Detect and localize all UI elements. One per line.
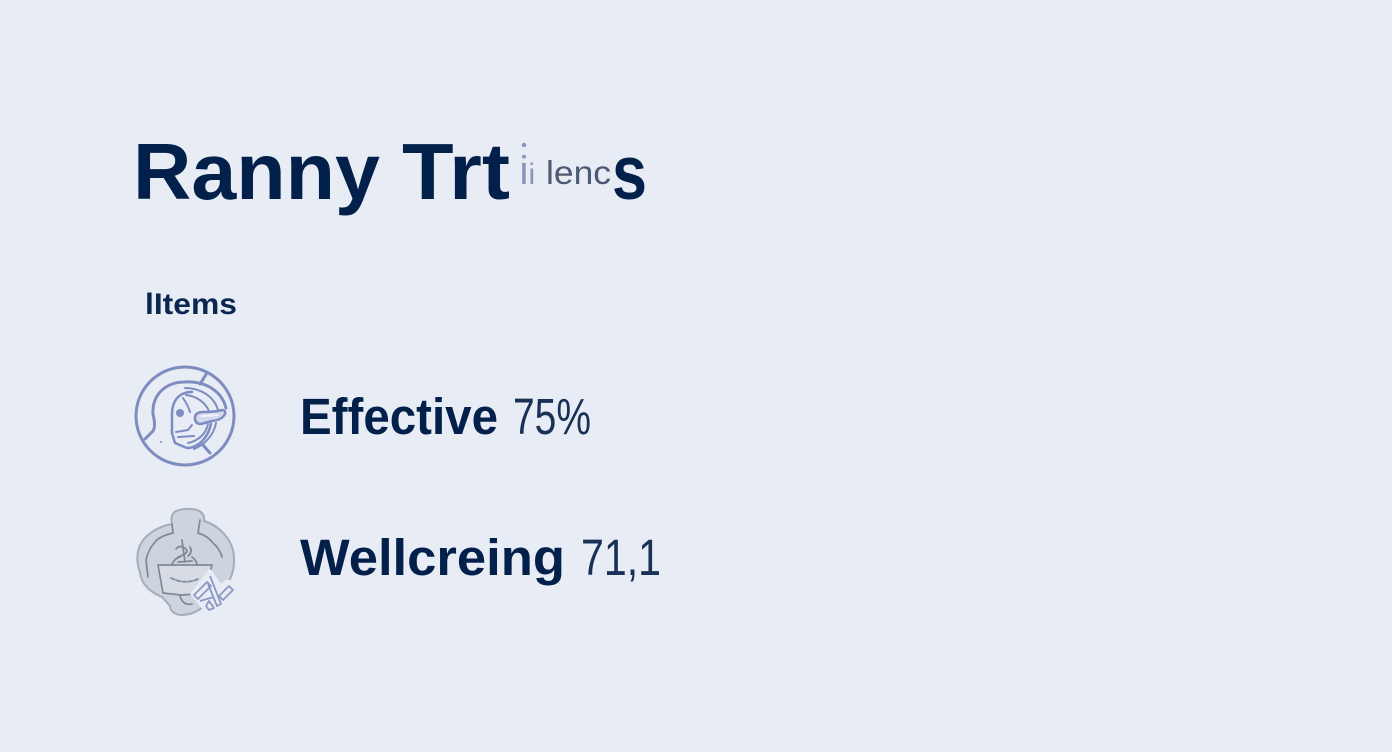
- icon: face in circle: [136, 367, 234, 465]
- title: i: [520, 149, 528, 193]
- icon: small white-edged glyph: [193, 572, 233, 612]
- row 1 label: effective: 75%: [513, 388, 591, 445]
- section heading: items: lItems: [145, 288, 237, 321]
- title: lenc: [546, 154, 611, 191]
- title: s: [612, 131, 647, 216]
- row 1 label: effective: Effective: [300, 388, 498, 445]
- row 2 label: wellcreing: 71,1: [581, 529, 661, 586]
- title: [133, 127, 647, 216]
- title: i: [528, 158, 535, 191]
- title: Ranny: [133, 127, 381, 216]
- row 2 label: wellcreing: Wellcreing: [300, 529, 565, 586]
- icon: grey badge: [137, 509, 234, 615]
- title: Trt: [402, 127, 510, 216]
